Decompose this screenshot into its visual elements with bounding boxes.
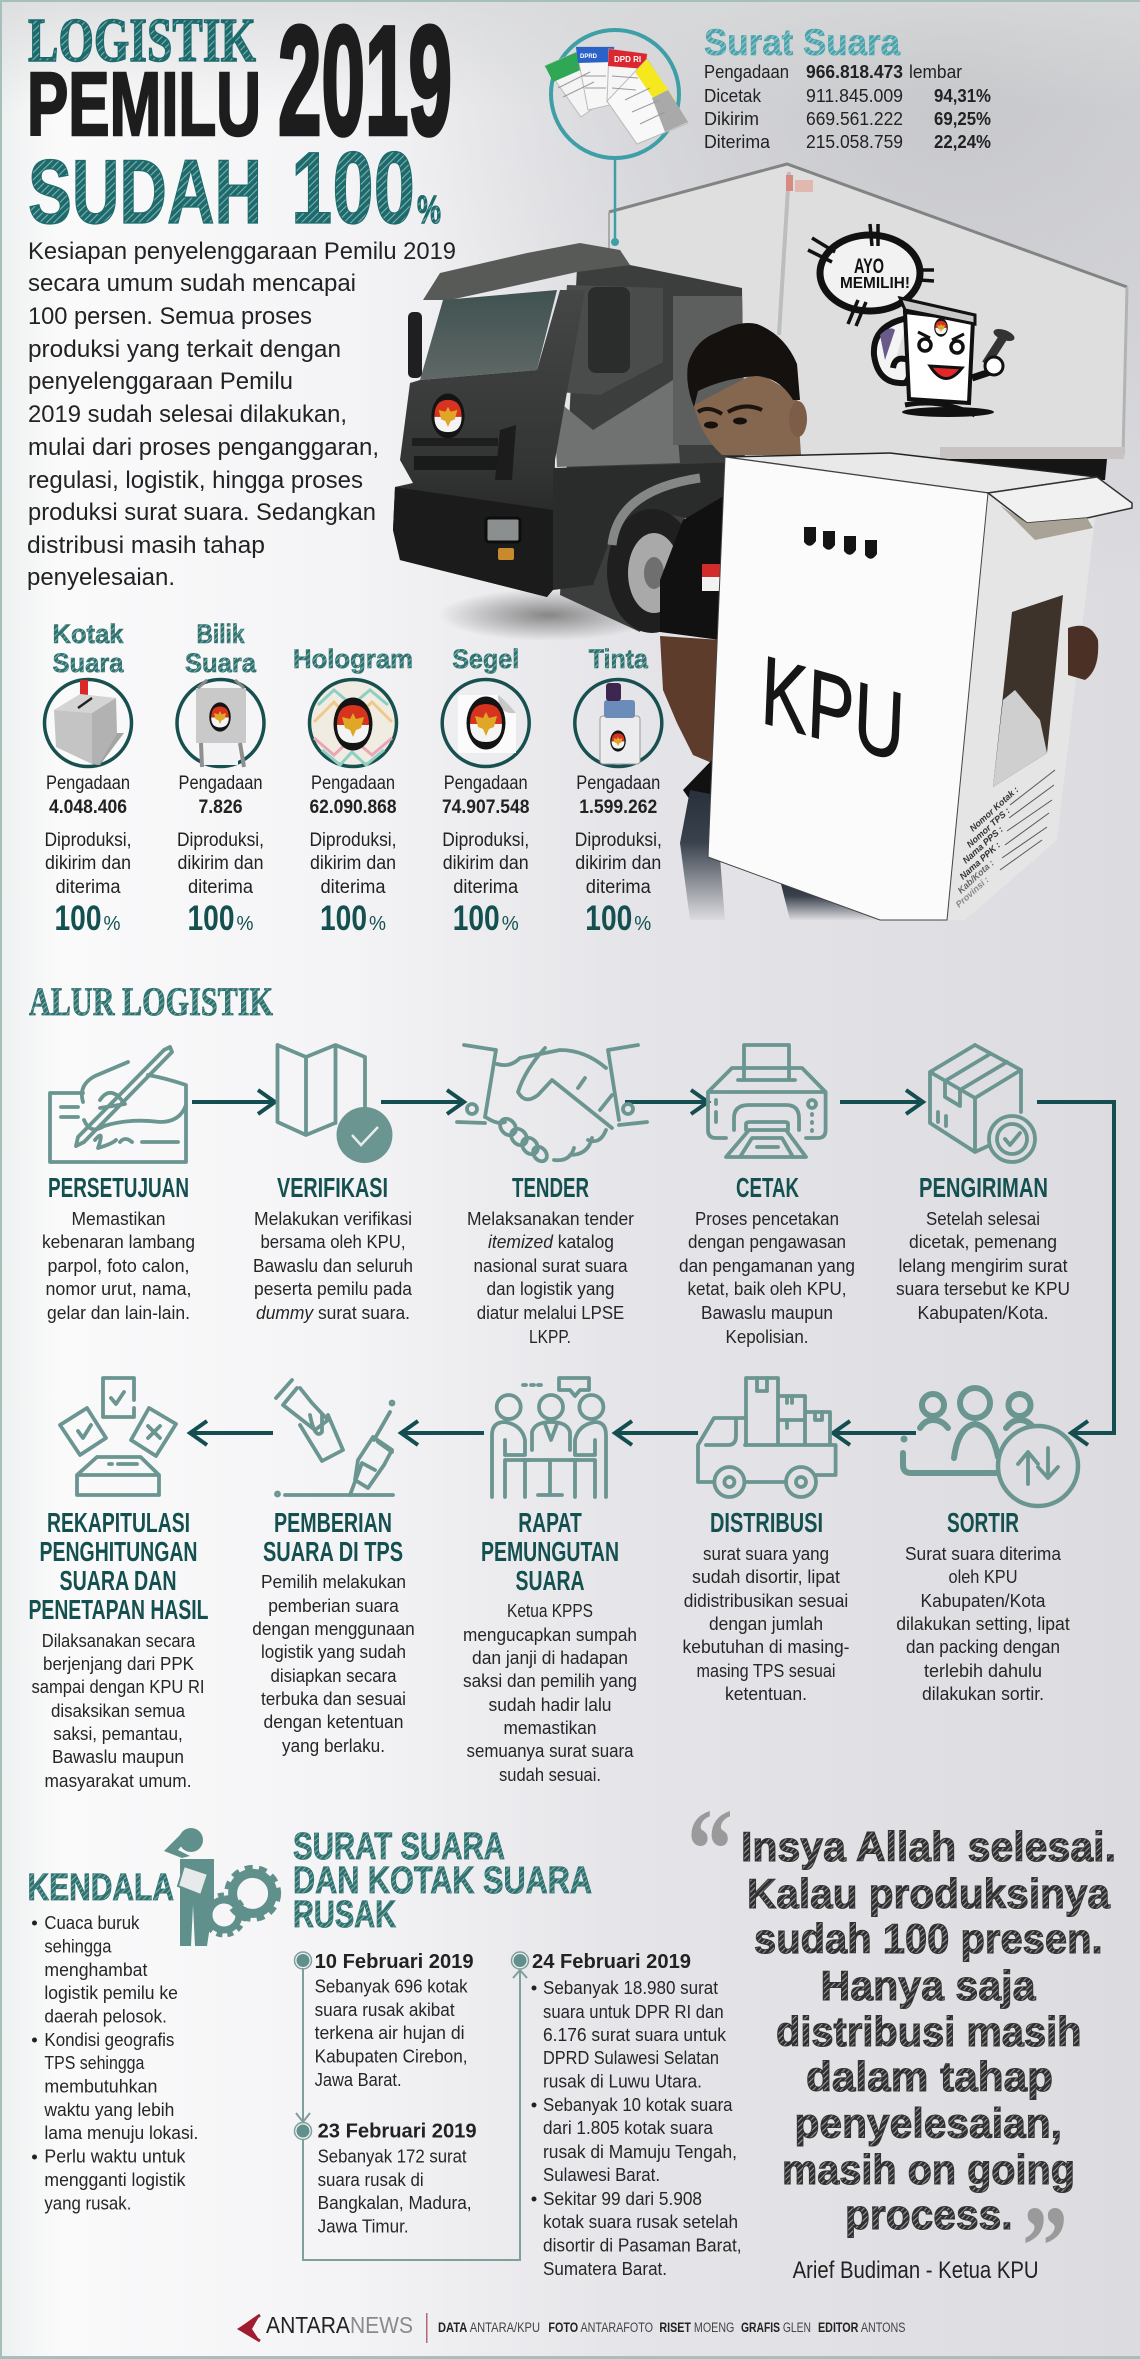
step: cetak <box>679 1045 855 1347</box>
logo: antara news: NEWS <box>350 2312 413 2338</box>
step: rekapitulasi <box>28 1378 208 1791</box>
step: sortir: SORTIR <box>947 1507 1019 1538</box>
logistics item: segel: Diproduksi, <box>442 830 529 851</box>
step: sortir: dilakukan sortir. <box>922 1684 1044 1704</box>
step: tender: itemized katalog <box>488 1232 614 1252</box>
event: 24 februari 2019: 24 Februari 2019 <box>532 1951 691 1973</box>
step: sortir <box>896 1388 1078 1704</box>
step: pemberian suara di tps: terbuka dan sesuai <box>261 1689 406 1709</box>
logistics item: tinta: Diproduksi, <box>575 830 662 851</box>
ballot sheets circle: DPD RI <box>614 55 641 64</box>
logistics item: bilik suara <box>177 619 264 938</box>
callout: surat suara <box>545 22 991 246</box>
event: 10 februari 2019 <box>315 1951 474 2090</box>
logistics item: bilik suara: Diproduksi, <box>177 830 264 851</box>
step: distribusi <box>682 1378 850 1704</box>
logistics item: kotak suara <box>44 619 132 938</box>
surat suara table: 215.058.759 <box>806 131 903 152</box>
step: rapat pemungutan suara: sudah hadir lalu <box>488 1695 612 1715</box>
step: verifikasi: bersama oleh KPU, <box>260 1232 406 1252</box>
surat suara table <box>704 61 991 152</box>
step: rapat pemungutan suara: Ketua KPPS <box>507 1601 593 1621</box>
icon: signing document <box>50 1047 186 1162</box>
intro text: produksi yang terkait dengan <box>28 336 341 363</box>
step: verifikasi: VERIFIKASI <box>277 1172 388 1203</box>
intro text: 2019 sudah selesai dilakukan, <box>28 401 347 428</box>
photo: man carrying ballot box <box>660 323 880 920</box>
intro text: 100 persen. Semua proses <box>28 303 312 330</box>
callout: surat suara: Surat Suara <box>704 22 900 63</box>
event: 10 februari 2019: Kabupaten Cirebon, <box>315 2046 468 2066</box>
logistics item: kotak suara: diterima <box>56 877 121 898</box>
intro text: secara umum sudah mencapai <box>28 270 356 297</box>
quote: sudah 100 presen. <box>754 1915 1103 1962</box>
logistics item: kotak suara: Kotak <box>52 619 124 649</box>
ballot sheets circle: DPRD <box>580 54 598 60</box>
surat suara table: 966.818.473 <box>806 61 903 82</box>
icon: truck with boxes <box>698 1378 836 1497</box>
logistics item: bilik suara: 7.826 <box>198 797 242 818</box>
surat suara table: Dicetak <box>704 85 762 106</box>
event: 23 februari 2019: Sebanyak 172 surat <box>318 2147 467 2167</box>
step: cetak: CETAK <box>736 1172 799 1203</box>
step: pemberian suara di tps: disiapkan secara <box>270 1666 397 1686</box>
intro text <box>27 238 456 591</box>
bullet list: daerah pelosok. <box>44 2007 167 2027</box>
step: cetak: Proses pencetakan <box>695 1209 839 1229</box>
intro text: Kesiapan penyelenggaraan Pemilu 2019 <box>28 238 456 265</box>
bullet list: yang rusak. <box>44 2194 131 2214</box>
logistics item: segel: Pengadaan <box>444 773 528 794</box>
intro text: penyelesaian. <box>27 564 175 591</box>
step: distribusi: surat suara yang <box>703 1544 829 1564</box>
mascot: ayo memilih <box>808 224 1016 417</box>
event: 10 februari 2019: Sebanyak 696 kotak <box>315 1976 469 1996</box>
bullet list: logistik pemilu ke <box>44 1983 178 2003</box>
step: rapat pemungutan suara: semuanya surat suara <box>466 1741 634 1761</box>
logistics item: hologram: % <box>369 913 386 935</box>
step: rapat pemungutan suara <box>463 1378 637 1785</box>
mascot: ayo memilih: AYO <box>854 255 884 278</box>
ballot box <box>708 453 1132 920</box>
step: pengiriman: Kabupaten/Kota. <box>918 1303 1048 1323</box>
step: persetujuan: gelar dan lain-lain. <box>47 1303 190 1323</box>
ballot box: Nama PPK : <box>958 840 1002 881</box>
logistics item: hologram: Hologram <box>293 644 413 674</box>
step: verifikasi: dummy surat suara. <box>256 1303 410 1323</box>
quote: Arief Budiman - Ketua KPU <box>793 2257 1039 2284</box>
surat suara table: 911.845.009 <box>806 85 903 106</box>
step: rapat pemungutan suara: dan janji di hadapan <box>472 1648 628 1668</box>
quote: masih on going <box>782 2146 1075 2193</box>
logistics item: tinta: Tinta <box>589 644 649 674</box>
step: rekapitulasi: sampai dengan KPU RI <box>32 1677 204 1697</box>
panel: kendala <box>28 1828 279 2214</box>
step: pemberian suara di tps: logistik yang sudah <box>261 1642 406 1662</box>
step: tender: dan logistik yang <box>486 1279 614 1299</box>
surat suara table: Pengadaan <box>704 61 789 82</box>
step: persetujuan <box>42 1047 195 1323</box>
step: pemberian suara di tps: pemberian suara <box>268 1596 400 1616</box>
logistics item: bilik suara: diterima <box>188 877 253 898</box>
event: 23 februari 2019 <box>318 2121 477 2237</box>
step: pengiriman: PENGIRIMAN <box>919 1172 1048 1203</box>
surat suara table: 69,25% <box>934 108 991 129</box>
step: tender: TENDER <box>512 1172 589 1203</box>
logistics item: hologram: Pengadaan <box>311 773 395 794</box>
step: pemberian suara di tps: PEMBERIAN <box>274 1507 392 1538</box>
logistics item: hologram <box>293 644 413 938</box>
step: persetujuan: PERSETUJUAN <box>48 1172 189 1203</box>
icon: person with gears <box>164 1828 279 1946</box>
event: 24 februari 2019: rusak di Mamuju Tengah, <box>543 2142 737 2162</box>
logistics item: kotak suara: 4.048.406 <box>49 797 127 818</box>
panel: surat suara dan kotak suara rusak <box>293 1826 742 2279</box>
ballot box: Nama PPS : <box>961 824 1005 865</box>
bullet list: lama menuju lokasi. <box>44 2123 198 2143</box>
event: 24 februari 2019: suara untuk DPR RI dan <box>543 2002 724 2022</box>
step: distribusi: sudah disortir, lipat <box>692 1567 840 1587</box>
step: rekapitulasi: masyarakat umum. <box>44 1771 192 1791</box>
logistics item: segel: Segel <box>452 644 519 674</box>
step: sortir: Kabupaten/Kota <box>920 1591 1046 1611</box>
panel: kendala: KENDALA <box>28 1867 174 1909</box>
logistics item: kotak suara: Diproduksi, <box>44 830 132 851</box>
step: rekapitulasi: disaksikan semua <box>51 1701 186 1721</box>
surat suara table: Diterima <box>704 131 771 152</box>
quote: penyelesaian, <box>794 2100 1062 2147</box>
step: cetak: dengan pengawasan <box>688 1232 846 1252</box>
step: persetujuan: nomor urut, nama, <box>46 1279 192 1299</box>
logistics item: hologram: 62.090.868 <box>310 797 396 818</box>
step: pengiriman: dicetak, pemenang <box>909 1232 1057 1252</box>
event: 10 februari 2019: Jawa Barat. <box>315 2070 402 2090</box>
step: cetak: ketat, baik oleh KPU, <box>688 1279 846 1299</box>
ballot box: Nomor Kotak : <box>968 785 1020 833</box>
logistics item: segel: % <box>502 913 519 935</box>
heading: DAN KOTAK SUARA <box>293 1860 592 1902</box>
title: SUDAH <box>28 142 262 243</box>
quote: Hanya saja <box>820 1962 1036 2009</box>
step: cetak: dan pengamanan yang <box>679 1256 855 1276</box>
logo: antara news: ANTARA <box>266 2312 351 2338</box>
ballot box: KPU <box>759 634 907 783</box>
event: 24 februari 2019: kotak suara rusak setelah <box>543 2212 738 2232</box>
surat suara table: Dikirim <box>704 108 759 129</box>
step: persetujuan: kebenaran lambang <box>42 1232 195 1252</box>
step: rapat pemungutan suara: RAPAT <box>518 1507 582 1538</box>
truck cab <box>393 243 745 641</box>
step: rapat pemungutan suara: SUARA <box>516 1565 584 1596</box>
event: 23 februari 2019: Jawa Timur. <box>318 2217 409 2237</box>
logistics item: tinta: Pengadaan <box>576 773 660 794</box>
credits text: GRAFIS GLEN <box>741 2320 811 2335</box>
event: 10 februari 2019: terkena air hujan di <box>315 2023 465 2043</box>
logistics item: bilik suara: Bilik <box>196 619 245 649</box>
step: verifikasi <box>253 1045 413 1323</box>
icon: printer <box>708 1045 826 1157</box>
step: rapat pemungutan suara: mengucapkan sumpah <box>463 1625 637 1645</box>
surat suara table: 94,31% <box>934 85 991 106</box>
event: 24 februari 2019: DPRD Sulawesi Selatan <box>543 2048 719 2068</box>
logistics item: kotak suara: Pengadaan <box>46 773 130 794</box>
step: cetak: Bawaslu maupun <box>701 1303 833 1323</box>
credits text: EDITOR ANTONS <box>818 2320 906 2335</box>
intro text: regulasi, logistik, hingga proses <box>28 467 363 494</box>
step: distribusi: masing TPS sesuai <box>696 1661 836 1681</box>
event: 10 februari 2019: suara rusak akibat <box>315 2000 455 2020</box>
quote: ” <box>1022 2183 1068 2310</box>
logistics item: hologram: diterima <box>320 877 386 898</box>
event: 24 februari 2019: dari 1.805 kotak suara <box>543 2118 714 2138</box>
surat suara table: 669.561.222 <box>806 108 903 129</box>
quote: dalam tahap <box>806 2053 1053 2100</box>
event: 23 februari 2019: suara rusak di <box>318 2170 424 2190</box>
logistics item: kotak suara: 100 <box>54 899 102 938</box>
bullet list: sehingga <box>44 1936 112 1956</box>
step: rapat pemungutan suara: memastikan <box>504 1718 596 1738</box>
quote: “ <box>687 1786 733 1913</box>
quote: distribusi masih <box>776 2008 1082 2055</box>
step: cetak: Kepolisian. <box>726 1327 808 1347</box>
step: distribusi: dengan jumlah <box>709 1614 823 1634</box>
event: 24 februari 2019: 6.176 surat suara untuk <box>543 2025 727 2045</box>
logistics item: bilik suara: % <box>236 913 254 935</box>
step: pengiriman: suara tersebut ke KPU <box>896 1279 1070 1299</box>
bullet list: TPS sehingga <box>44 2053 145 2073</box>
step: rekapitulasi: REKAPITULASI <box>47 1507 190 1538</box>
heading: RUSAK <box>293 1894 396 1936</box>
step: rapat pemungutan suara: PEMUNGUTAN <box>481 1536 619 1567</box>
credits text: DATA ANTARA/KPU <box>438 2320 540 2335</box>
title <box>27 0 452 245</box>
step: sortir: Surat suara diterima <box>905 1544 1062 1564</box>
icon: people sorting <box>900 1388 1078 1506</box>
credits text: FOTO ANTARAFOTO <box>548 2320 653 2335</box>
bullet list: mengganti logistik <box>44 2170 186 2190</box>
event: 24 februari 2019: Sebanyak 10 kotak suara <box>543 2095 733 2115</box>
logistics item: segel: 74.907.548 <box>442 797 529 818</box>
step: rekapitulasi: PENETAPAN HASIL <box>28 1594 208 1625</box>
intro text: distribusi masih tahap <box>27 532 265 559</box>
step: tender: LKPP. <box>529 1327 571 1347</box>
title: % <box>417 188 441 232</box>
step: distribusi: DISTRIBUSI <box>710 1507 823 1538</box>
bullet list: waktu yang lebih <box>43 2100 174 2120</box>
step: pemberian suara di tps: yang berlaku. <box>282 1736 385 1756</box>
step: pemberian suara di tps <box>252 1380 415 1756</box>
bullet list: Perlu waktu untuk <box>44 2147 186 2167</box>
intro text: penyelenggaraan Pemilu <box>28 368 293 395</box>
step: distribusi: didistribusikan sesuai <box>684 1591 848 1611</box>
step: tender: diatur melalui LPSE <box>477 1303 624 1323</box>
intro text: mulai dari proses penganggaran, <box>28 434 379 461</box>
logistics item: tinta <box>575 644 662 938</box>
event: 24 februari 2019: rusak di Luwu Utara. <box>543 2072 702 2092</box>
step: sortir: dilakukan setting, lipat <box>896 1614 1070 1634</box>
bullet list <box>32 1913 198 2214</box>
logistics item: tinta: % <box>634 913 651 935</box>
quote: Kalau produksinya <box>747 1870 1111 1917</box>
ballot box: Nomor TPS : <box>965 806 1012 849</box>
bullet list: Cuaca buruk <box>44 1913 140 1933</box>
step: pengiriman: lelang mengirim surat <box>898 1256 1068 1276</box>
logistics item: hologram: 100 <box>320 899 367 938</box>
logistics item: bilik suara: Pengadaan <box>178 773 262 794</box>
quote: Insya Allah selesai. <box>741 1823 1116 1870</box>
logistics item: tinta: 100 <box>585 899 632 938</box>
event: 24 februari 2019: Sulawesi Barat. <box>543 2165 660 2185</box>
event: 24 februari 2019: Sumatera Barat. <box>543 2259 667 2279</box>
mascot: ayo memilih: MEMILIH! <box>840 275 910 292</box>
logistics item: segel: 100 <box>453 899 500 938</box>
step: verifikasi: Bawaslu dan seluruh <box>253 1256 413 1276</box>
credits text <box>438 2320 906 2335</box>
intro text: produksi surat suara. Sedangkan <box>28 499 376 526</box>
step: tender: Melaksanakan tender <box>467 1209 634 1229</box>
step: verifikasi: Melakukan verifikasi <box>254 1209 412 1229</box>
logistics item: tinta: diterima <box>586 877 651 898</box>
step: distribusi: ketentuan. <box>725 1684 807 1704</box>
step: rekapitulasi: berjenjang dari PPK <box>43 1654 194 1674</box>
step: tender <box>457 1045 647 1347</box>
step: rekapitulasi: Bawaslu maupun <box>52 1747 184 1767</box>
step: pemberian suara di tps: dengan menggunaan <box>252 1619 415 1639</box>
bullet list: membutuhkan <box>44 2077 157 2097</box>
step: pengiriman <box>896 1045 1070 1323</box>
logistics item: segel: dikirim dan <box>443 853 529 874</box>
title: PEMILU <box>27 55 261 155</box>
step: sortir: oleh KPU <box>948 1567 1018 1587</box>
step: pemberian suara di tps: Pemilih melakukan <box>261 1572 406 1592</box>
heading: alur logistik: ALUR LOGISTIK <box>29 979 273 1024</box>
title: 100 <box>291 131 415 245</box>
step: rekapitulasi: saksi, pemantau, <box>53 1724 183 1744</box>
credits text: RISET MOENG <box>659 2320 734 2335</box>
step: distribusi: kebutuhan di masing- <box>682 1637 850 1657</box>
logo: antara news <box>237 2312 428 2343</box>
step: rekapitulasi: PENGHITUNGAN <box>40 1536 198 1567</box>
logistics item: tinta: dikirim dan <box>575 853 661 874</box>
logistics item: tinta: 1.599.262 <box>579 797 657 818</box>
timeline connector <box>294 1952 528 2260</box>
ballot box: Provinsi : <box>954 875 991 909</box>
logistics item: bilik suara: Suara <box>185 648 257 678</box>
step: rapat pemungutan suara: sudah sesuai. <box>499 1765 601 1785</box>
event: 24 februari 2019: Sebanyak 18.980 surat <box>543 1978 718 1998</box>
step: verifikasi: peserta pemilu pada <box>254 1279 413 1299</box>
step: sortir: dan packing dengan <box>906 1637 1060 1657</box>
bullet list: menghambat <box>44 1960 147 1980</box>
icon: handshake <box>457 1045 647 1164</box>
logistics item: segel <box>442 644 529 938</box>
flow arrows <box>190 1090 1114 1445</box>
logistics item: segel: diterima <box>453 877 519 898</box>
step: sortir: terlebih dahulu <box>924 1661 1042 1681</box>
step: persetujuan: parpol, foto calon, <box>48 1256 190 1276</box>
surat suara table: 22,24% <box>934 131 991 152</box>
logistics item: kotak suara: Suara <box>52 648 124 678</box>
heading <box>293 1826 592 1936</box>
ballot box: Kab/Kota : <box>956 858 996 895</box>
event: 24 februari 2019: Sekitar 99 dari 5.908 <box>543 2189 702 2209</box>
icon: ballot papers and box <box>60 1378 176 1495</box>
event: 10 februari 2019: 10 Februari 2019 <box>315 1951 474 1973</box>
icon: folded document with check <box>278 1045 392 1163</box>
step: tender: nasional surat suara <box>474 1256 628 1276</box>
step: pengiriman: Setelah selesai <box>926 1209 1040 1229</box>
logistics item: bilik suara: 100 <box>188 899 234 938</box>
quote: process. <box>845 2191 1013 2238</box>
logistics item: hologram: dikirim dan <box>310 853 396 874</box>
step: persetujuan: Memastikan <box>72 1209 166 1229</box>
step: rekapitulasi: Dilaksanakan secara <box>42 1631 196 1651</box>
event: 23 februari 2019: 23 Februari 2019 <box>318 2121 477 2143</box>
heading: SURAT SUARA <box>293 1826 505 1868</box>
step: pemberian suara di tps: dengan ketentuan <box>264 1712 404 1732</box>
step: rapat pemungutan suara: saksi dan pemilih yang <box>463 1671 637 1691</box>
logistics item: bilik suara: dikirim dan <box>178 853 264 874</box>
truck cargo box <box>609 164 1127 482</box>
step: pemberian suara di tps: SUARA DI TPS <box>263 1536 403 1567</box>
title: LOGISTIK <box>28 7 256 75</box>
logistics item: kotak suara: dikirim dan <box>45 853 131 874</box>
step: rekapitulasi: SUARA DAN <box>60 1565 176 1596</box>
event: 23 februari 2019: Bangkalan, Madura, <box>318 2193 472 2213</box>
footer credits <box>237 2312 906 2343</box>
event: 24 februari 2019: disortir di Pasaman Barat, <box>543 2236 742 2256</box>
icon: hands casting ballots <box>276 1380 394 1496</box>
icon: package <box>930 1045 1035 1162</box>
surat suara table: lembar <box>909 61 962 82</box>
logistics item: kotak suara: % <box>104 913 121 935</box>
event: 24 februari 2019 <box>532 1951 742 2279</box>
ballot sheets circle <box>545 30 688 246</box>
bullet list: Kondisi geografis <box>44 2030 174 2050</box>
logistics item: hologram: Diproduksi, <box>310 830 396 851</box>
quote <box>687 1786 1116 2310</box>
icon: meeting people <box>492 1378 606 1497</box>
